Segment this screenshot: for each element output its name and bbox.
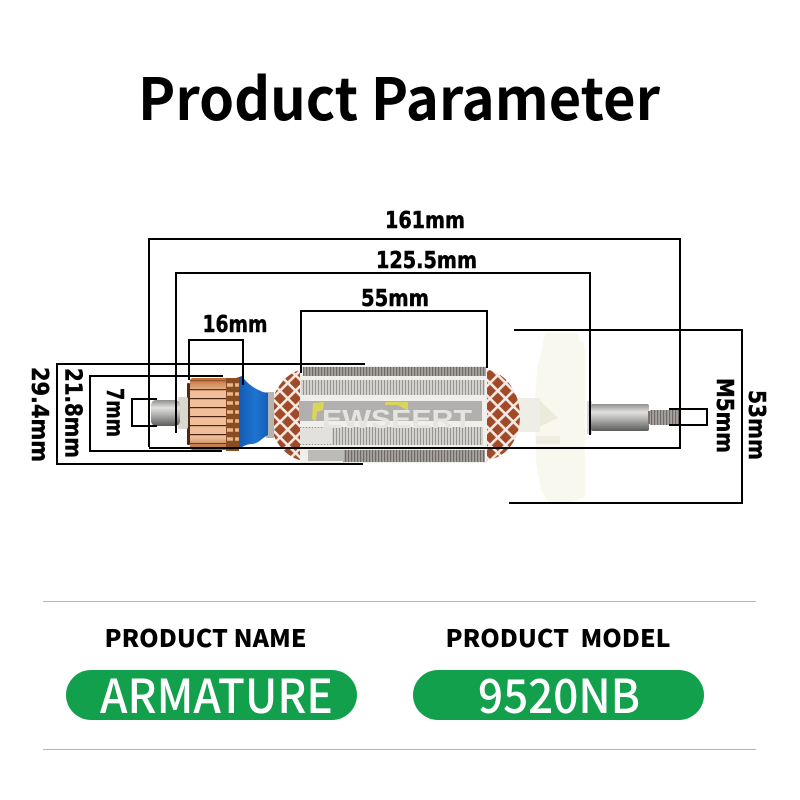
blue insulation (236, 376, 268, 449)
label: 7mm: 7mm (101, 388, 127, 437)
label: M5mm: M5mm (711, 378, 737, 453)
dimension: 7mm (132, 399, 157, 426)
rear winding (484, 369, 520, 461)
dimension: 53mm (509, 330, 742, 503)
commutator (187, 378, 239, 451)
title: Product Parameter (138, 53, 661, 137)
front winding (270, 369, 304, 461)
dimension: 16mm (189, 340, 243, 385)
steel shaft (587, 401, 652, 434)
laminated core (299, 366, 487, 463)
dimension: 55mm (301, 311, 487, 373)
dimension lines (57, 239, 742, 503)
dimension: 29.4mm (57, 364, 365, 464)
label: 125.5mm: 125.5mm (376, 248, 477, 274)
shaft tip (151, 397, 188, 429)
dimension: 21.8mm (90, 376, 223, 451)
bottom divider (43, 749, 756, 750)
heading: product model: PRODUCT MODEL (446, 619, 670, 654)
pill: 9520NB: 9520NB (478, 658, 640, 727)
grey winding neck (266, 392, 274, 438)
dimension: 161mm (149, 239, 680, 448)
fan (535, 333, 585, 502)
dimension: M5mm (669, 409, 707, 425)
heading: product name: PRODUCT NAME (104, 619, 306, 654)
label: 16mm: 16mm (202, 312, 268, 338)
label: 29.4mm: 29.4mm (26, 367, 52, 462)
pill: 9520NB (413, 658, 704, 727)
label: 53mm: 53mm (743, 390, 769, 460)
dimension: 125.5mm (176, 273, 590, 435)
product photo: armature (151, 333, 680, 502)
top divider (43, 601, 756, 602)
label: 21.8mm: 21.8mm (60, 368, 86, 458)
threaded tip (650, 410, 680, 425)
label: 161mm: 161mm (385, 208, 465, 234)
rear white hub (516, 398, 540, 432)
logo watermark: EWSEERT (322, 404, 472, 434)
label: 55mm: 55mm (361, 286, 429, 312)
pill: armature: ARMATURE (100, 658, 333, 727)
